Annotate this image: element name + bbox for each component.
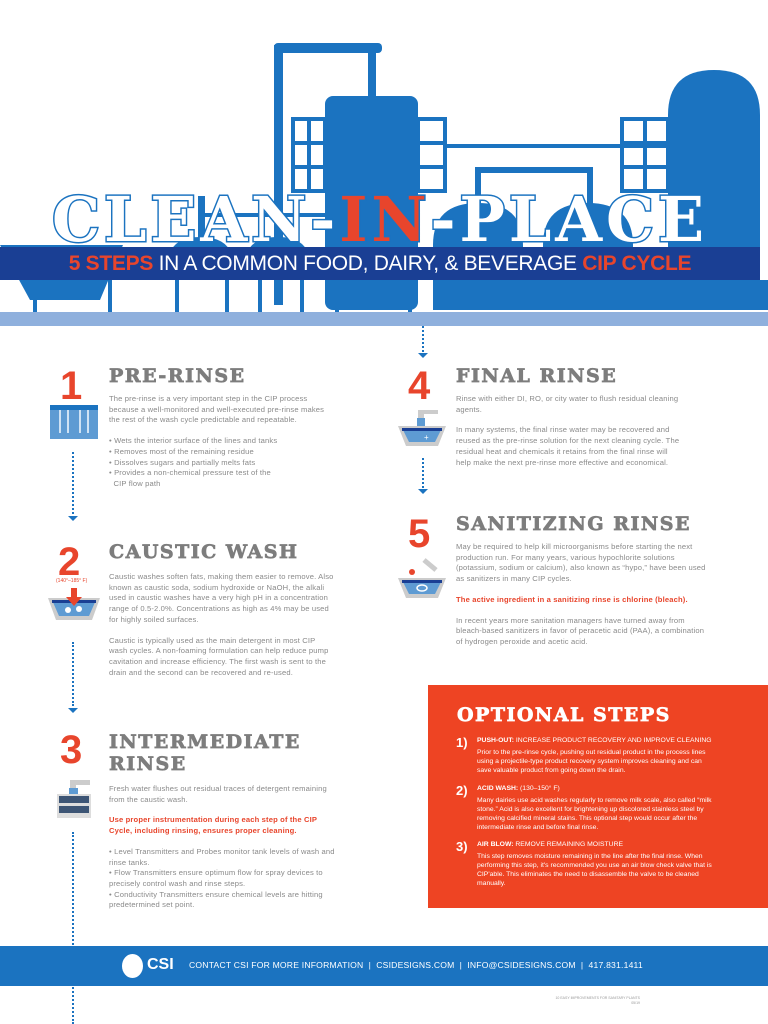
heading: OPTIONAL STEPS — [457, 704, 671, 726]
arrow 3 — [72, 832, 74, 1024]
heading — [109, 731, 301, 775]
text: Fresh water flushes out residual traces of detergent remaining from the caustic wash. — [109, 784, 327, 804]
panel: optional steps: PUSH-OUT: INCREASE PRODUCT RECOVERY AND IMPROVE CLEANING — [477, 737, 712, 744]
text: CIP flow path — [114, 479, 160, 488]
text: • Level Transmitters and Probes monitor tank levels of wash and rinse tanks. — [109, 847, 335, 867]
footnote: 05/19 — [631, 1001, 640, 1005]
text — [456, 542, 706, 646]
number 5: 5 — [408, 512, 430, 556]
footnote: 10 EASY IMPROVEMENTS FOR SANITARY PLANTS — [555, 996, 640, 1000]
number 1: 1 — [60, 364, 82, 408]
footnote — [555, 996, 640, 1005]
text — [456, 394, 679, 467]
subtitle band — [0, 247, 760, 280]
panel: optional steps: Many dairies use acid washes regularly to remove milk scale, also called “milk stone.” Acid is also excellent for brightening up discolored stainless steel by removing calcified mineral stains. This optional step would occur after the intermediate rinse and before final rinse. — [477, 797, 712, 831]
text: May be required to help kill microorganisms before starting the next production run. For many years, various hypochlorite solutions (potassium, sodium or calcium), also known as “hypo,” have been used as sanitizers in many CIP cycles. — [456, 542, 706, 583]
step 2: (140°–185° F) — [56, 578, 87, 584]
heading: FINAL RINSE — [456, 365, 617, 387]
panel: optional steps: Prior to the pre-rinse cycle, pushing out residual product in the process lines using a projectile-type product recovery system improves cleaning and can save valuable product from going down the drain. — [477, 749, 706, 774]
step 4 — [398, 364, 679, 467]
text: In recent years more sanitation managers have turned away from bleach-based sanitizers in favor of peracetic acid (PAA), a combination of hydrogen peroxide and acetic acid. — [456, 616, 704, 646]
number 4: 4 — [408, 364, 430, 408]
panel: optional steps: 3) — [456, 839, 468, 854]
number 2: 2 — [58, 540, 80, 584]
text — [109, 784, 335, 909]
panel: optional steps: This step removes moisture remaining in the line after the final rinse. When performing this step, it's recommended you use an air blow check valve that is CIP'able. This eliminates the need to disassemble the valve to be cleaned manually. — [477, 853, 712, 887]
icon: final rinse — [398, 410, 446, 446]
text — [109, 572, 334, 677]
text: Caustic is typically used as the main detergent in most CIP wash cycles. A non-foaming formulation can help reduce pump cavitation and increase efficiency. The first wash is sent to the drain and the second can be recovered and re-used. — [109, 636, 328, 677]
item 3 — [456, 839, 712, 887]
panel: optional steps: 1) — [456, 735, 468, 750]
item 1 — [456, 735, 712, 774]
icon: sanitizing rinse — [398, 558, 446, 598]
step 3 — [57, 728, 335, 909]
logo: CSI — [147, 956, 174, 973]
step 2 — [48, 540, 334, 677]
logo — [122, 954, 174, 978]
text: Rinse with either DI, RO, or city water to flush residual cleaning agents. — [456, 394, 678, 414]
arrow 2 — [68, 642, 78, 713]
text: • Flow Transmitters ensure optimum flow for spray devices to precisely control wash and rinse steps. — [109, 868, 323, 888]
heading: RINSE — [109, 753, 187, 775]
text: • Removes most of the remaining residue — [109, 447, 254, 456]
text: • Wets the interior surface of the lines and tanks — [109, 436, 277, 445]
text: Caustic washes soften fats, making them easier to remove. Also known as caustic soda, sodium hydroxide or NaOH, the alkali used in caustic washes have a very high pH in a concentration range of 0.5-2.0%. Concentrations as high as 4% may be used for highly soiled surfaces. — [109, 572, 334, 624]
heading: PRE-RINSE — [109, 365, 246, 387]
text: The pre-rinse is a very important step in the CIP process because a well-monitored and well-executed pre-rinse makes the rest of the wash cycle predictable and repeatable. — [109, 394, 324, 424]
subtitle band: 5 STEPS IN A COMMON FOOD, DAIRY, & BEVERAGE CIP CYCLE — [69, 252, 691, 275]
panel: optional steps: 2) — [456, 783, 468, 798]
panel: optional steps — [428, 685, 768, 908]
header illustration — [0, 43, 768, 326]
text: • Conductivity Transmitters ensure chemical levels are hitting predetermined set point. — [109, 890, 323, 909]
text: Use proper instrumentation during each step of the CIP Cycle, including rinsing, ensures proper cleaning. — [109, 815, 317, 835]
text — [109, 394, 324, 488]
panel: optional steps: AIR BLOW: REMOVE REMAINING MOISTURE — [477, 841, 623, 848]
arrow 1 — [68, 452, 78, 521]
footer bar — [0, 946, 768, 986]
text: • Dissolves sugars and partially melts fats — [109, 458, 255, 467]
panel: optional steps: ACID WASH: (130–150° F) — [477, 785, 560, 792]
icon: caustic wash — [48, 588, 100, 620]
number 3: 3 — [60, 728, 82, 772]
item 2 — [456, 783, 712, 831]
heading: SANITIZING RINSE — [456, 513, 691, 535]
contact text: CONTACT CSI FOR MORE INFORMATION | CSIDESIGNS.COM | INFO@CSIDESIGNS.COM | 417.831.1411 — [189, 960, 643, 970]
arrow 4 — [418, 458, 428, 494]
arrow top — [418, 326, 428, 358]
text: In many systems, the final rinse water may be recovered and reused as the pre-rinse solution for the next cleaning cycle. The residual heat and chemicals it retains from the final rinse will help make the next pre-rinse more effective and economical. — [456, 425, 679, 467]
text: • Provides a non-chemical pressure test of the — [109, 468, 271, 477]
icon: final rinse: + — [424, 433, 429, 442]
icon: pre-rinse — [50, 405, 98, 439]
step 5 — [398, 512, 706, 646]
heading: INTERMEDIATE — [109, 731, 301, 753]
text: The active ingredient in a sanitizing rinse is chlorine (bleach). — [456, 595, 688, 604]
heading: CAUSTIC WASH — [109, 541, 298, 563]
step 1 — [50, 364, 324, 488]
icon: intermediate rinse — [57, 780, 91, 818]
